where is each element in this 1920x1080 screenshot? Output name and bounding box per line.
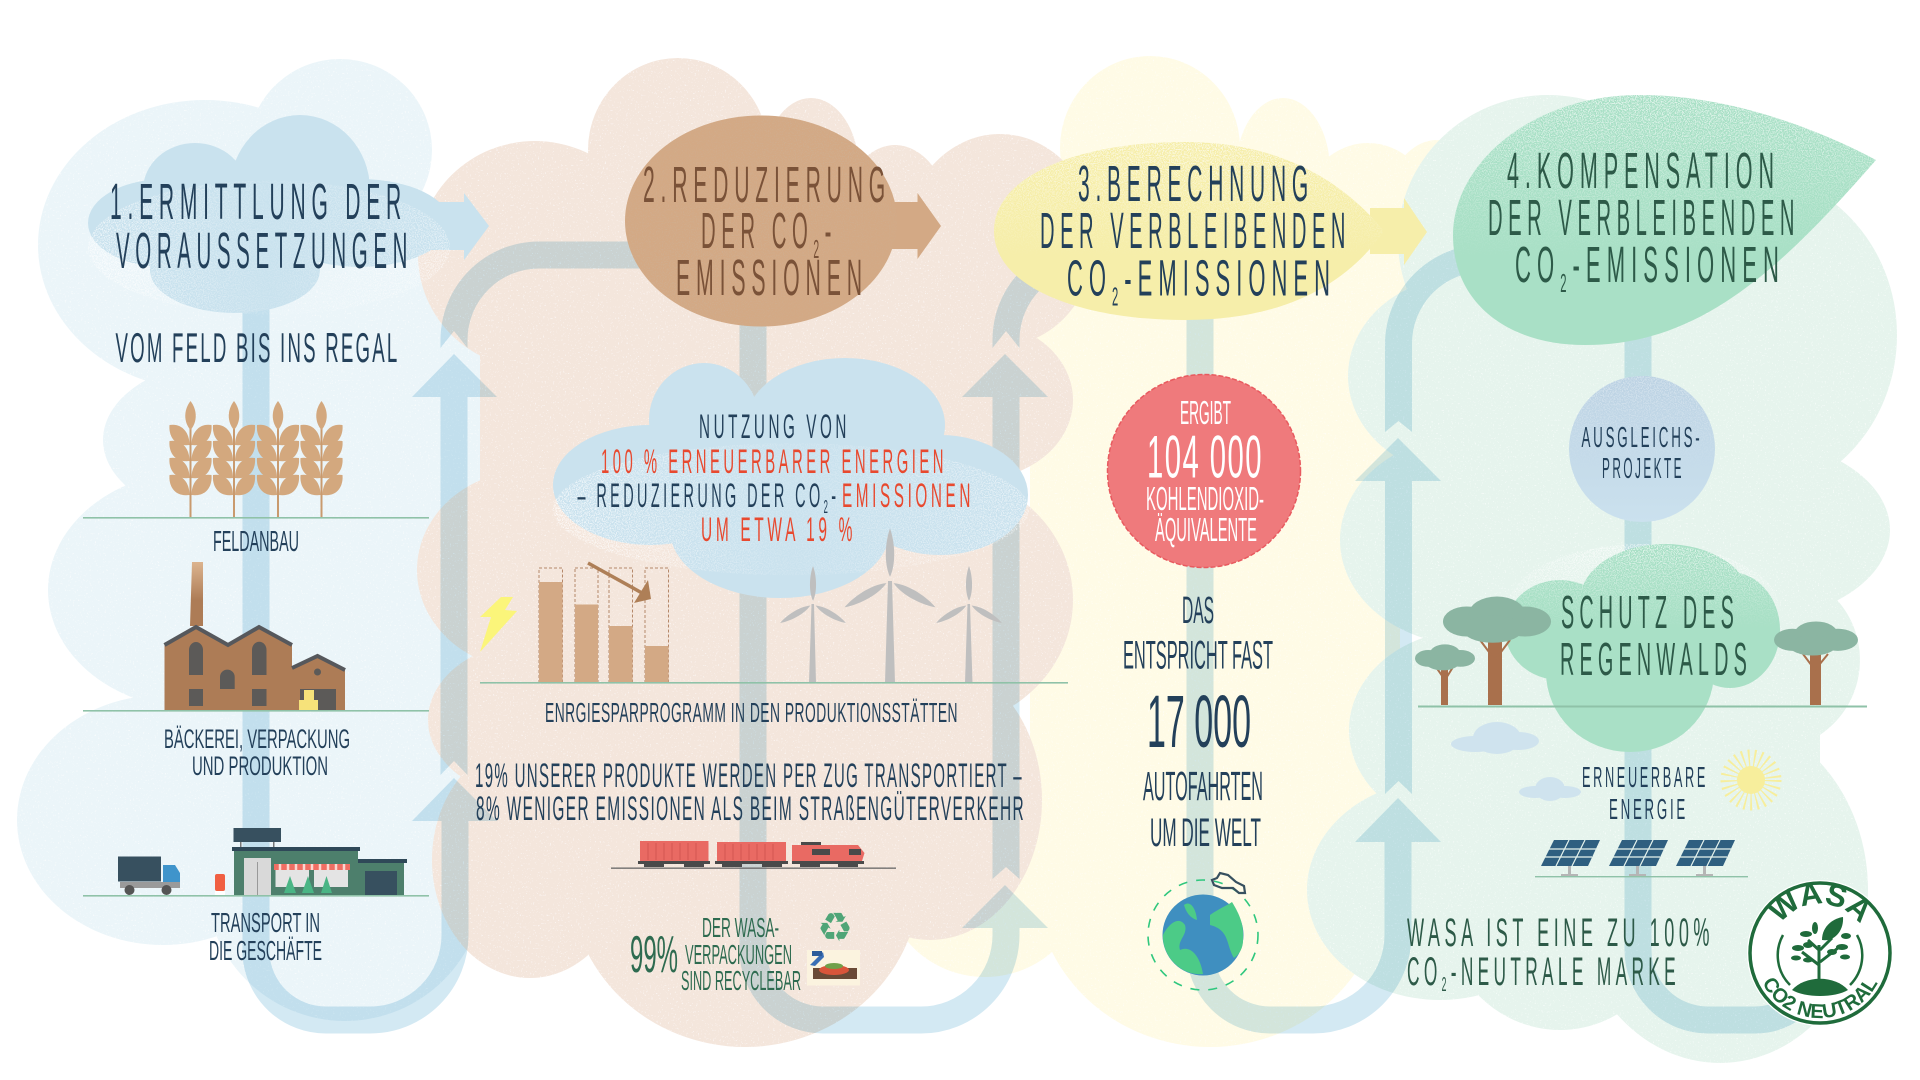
text: 2.REDUZIERUNG xyxy=(643,156,891,213)
heading: step 3: CO xyxy=(1067,250,1172,306)
text: 100% renewable energies xyxy=(578,408,974,549)
arrow: step 2 to step 3 xyxy=(880,193,941,259)
heading: step 2 xyxy=(643,156,891,306)
text: 100% renewable energies: 2 xyxy=(824,497,831,517)
label: renewable energy: ENERGIE xyxy=(1609,794,1688,826)
badge: offset projects xyxy=(1569,376,1715,522)
logo: Wasa CO2 neutral: CO2 NEUTRAL xyxy=(1764,978,1878,1018)
heading: step 4: CO xyxy=(1515,236,1620,293)
step 1 heading cloud with arrow xyxy=(88,115,489,315)
heading: step 2: 2 xyxy=(813,234,825,264)
heading: step 3 xyxy=(1040,155,1351,312)
text: 19% UNSERER PRODUKTE WERDEN PER ZUG TRANSPORTIERT – xyxy=(475,757,1023,795)
cloud panel: step 4 green xyxy=(1307,95,1897,1063)
text: UM DIE WELT xyxy=(1150,811,1261,855)
icon: wheat xyxy=(169,401,343,517)
stat: 99% packaging recyclable: DER WASA- xyxy=(702,912,779,943)
badge: offset projects: PROJEKTE xyxy=(1602,453,1684,485)
text: Wasa is a 100% CO2-neutral brand xyxy=(1407,911,1714,996)
text: SIND RECYCLEBAR xyxy=(681,965,801,996)
cloud panel: step 2 peach xyxy=(417,58,1095,1047)
text: VERPACKUNGEN xyxy=(685,939,792,970)
text: 100% renewable energies: NUTZUNG VON xyxy=(699,408,850,446)
label: transport to the shops: DIE GESCHÄFTE xyxy=(209,935,322,966)
cloud panel: step 1 blue xyxy=(17,59,485,1021)
text: rail transport xyxy=(475,757,1025,828)
icon: lightning bolt xyxy=(480,597,517,652)
text: Schutz des Regenwalds xyxy=(1560,586,1752,685)
badge: 104 000 CO2 equivalents xyxy=(1108,374,1300,568)
text: 100% renewable energies: - xyxy=(831,477,839,515)
icon: truck xyxy=(118,856,180,895)
heading: step 4: 2 xyxy=(1560,268,1573,298)
badge: offset projects: AUSGLEICHS- xyxy=(1582,422,1702,454)
stat: 99% packaging recyclable: 99% xyxy=(630,926,678,984)
icon: mailbox xyxy=(215,874,225,895)
arrow: downward trend xyxy=(588,563,651,603)
label: bakery, packaging and production: UND PRODUKTION xyxy=(192,751,328,781)
step 1 heading cloud with arrow: 1.ERMITTLUNG DER xyxy=(110,173,407,230)
text: equals almost 17 000 car trips: DAS xyxy=(1182,590,1214,632)
text: 100% renewable energies: – REDUZIERUNG DER CO xyxy=(578,477,1157,515)
heading: step 3: 2 xyxy=(1112,282,1124,312)
label: transport to the shops: TRANSPORT IN xyxy=(211,907,320,938)
text: DER VERBLEIBENDEN xyxy=(1040,202,1351,259)
text: 8% WENIGER EMISSIONEN ALS BEIM STRAßENGÜTERVERKEHR xyxy=(476,790,1025,828)
callout cloud: renewable energy: EMISSIONEN xyxy=(842,477,974,515)
heading: step 1 xyxy=(110,173,413,279)
icon: sun xyxy=(1729,758,1773,802)
cloud panel: step 3 yellow xyxy=(885,56,1497,1047)
arrow: step 3 to step 4 xyxy=(1370,198,1427,265)
badge: 104 000 CO2 equivalents: KOHLENDIOXID- xyxy=(1146,480,1264,517)
text: equals almost 17 000 car trips xyxy=(1123,590,1273,855)
heading: step 2: DER CO xyxy=(701,202,983,259)
label: transport to the shops xyxy=(209,907,322,966)
badge: 104 000 CO2 equivalents: 104 000 xyxy=(1147,424,1263,490)
text: ENTSPRICHT FAST xyxy=(1123,634,1273,678)
badge: 104 000 CO2 equivalents: ERGIBT xyxy=(1180,394,1231,431)
step 2 heading ellipse with arrow: EMISSIONEN xyxy=(676,249,868,306)
label: bakery, packaging and production: BÄCKEREI, VERPACKUNG xyxy=(164,724,350,754)
callout cloud: renewable energy xyxy=(553,358,1029,600)
text: Wasa is a 100% CO2-neutral brand: CO xyxy=(1407,950,1487,994)
text: Wasa is a 100% CO2-neutral brand: 2 xyxy=(1442,974,1451,996)
step 3 heading ellipse with arrow: 3.BERECHNUNG xyxy=(1078,155,1314,212)
heading: step 2: - xyxy=(825,202,837,259)
text: ERNEUERBARE xyxy=(1582,762,1708,794)
icon: wind turbines xyxy=(779,529,1003,683)
step 1 heading cloud with arrow: VORAUSSETZUNGEN xyxy=(116,222,413,279)
label: renewable energy xyxy=(1582,762,1708,826)
text: AUTOFAHRTEN xyxy=(1143,763,1263,809)
flow arrows connecting all steps xyxy=(256,242,1815,1020)
step 4 heading leaf xyxy=(1453,95,1876,345)
icon: shop xyxy=(232,828,407,895)
icon: small clouds xyxy=(1451,722,1581,801)
text: FELDANBAU xyxy=(213,526,299,558)
step 3 heading ellipse with arrow: -EMISSIONEN xyxy=(1124,250,1336,306)
label: bakery, packaging and production xyxy=(164,724,350,781)
step 3 heading ellipse with arrow xyxy=(994,142,1427,320)
cloud: rainforest protection xyxy=(1505,544,1780,752)
icon: factory xyxy=(164,562,345,711)
icon: recycling: ♻ xyxy=(817,905,853,951)
icon: solar panels xyxy=(1535,840,1748,877)
logo: Wasa CO2 neutral: WASA xyxy=(1766,885,1868,924)
icon: product pack xyxy=(807,950,860,986)
heading: step 4 xyxy=(1488,142,1800,298)
badge: 104 000 CO2 equivalents: ÄQUIVALENTE xyxy=(1155,511,1257,548)
text: ENRGIESPARPROGRAMM IN DEN PRODUKTIONSSTÄTTEN xyxy=(545,697,958,728)
step 2 heading ellipse with arrow xyxy=(625,116,941,326)
text: VOM FELD BIS INS REGAL xyxy=(116,324,400,371)
icon: trees xyxy=(1415,596,1858,705)
logo: Wasa CO2 neutral xyxy=(1747,880,1892,1026)
callout cloud: renewable energy: 100 % ERNEUERBARER ENERGIEN xyxy=(601,443,947,481)
text: 100% renewable energies: UM ETWA 19 % xyxy=(701,511,856,549)
text: equals almost 17 000 car trips: 17 000 xyxy=(1147,680,1251,763)
arrow: step 1 to step 2 xyxy=(420,193,489,260)
bar chart: energy saving xyxy=(539,563,668,682)
icon: train xyxy=(611,841,896,869)
stat: 99% packaging recyclable xyxy=(630,912,801,996)
icon: globe with car orbit xyxy=(1148,873,1258,990)
